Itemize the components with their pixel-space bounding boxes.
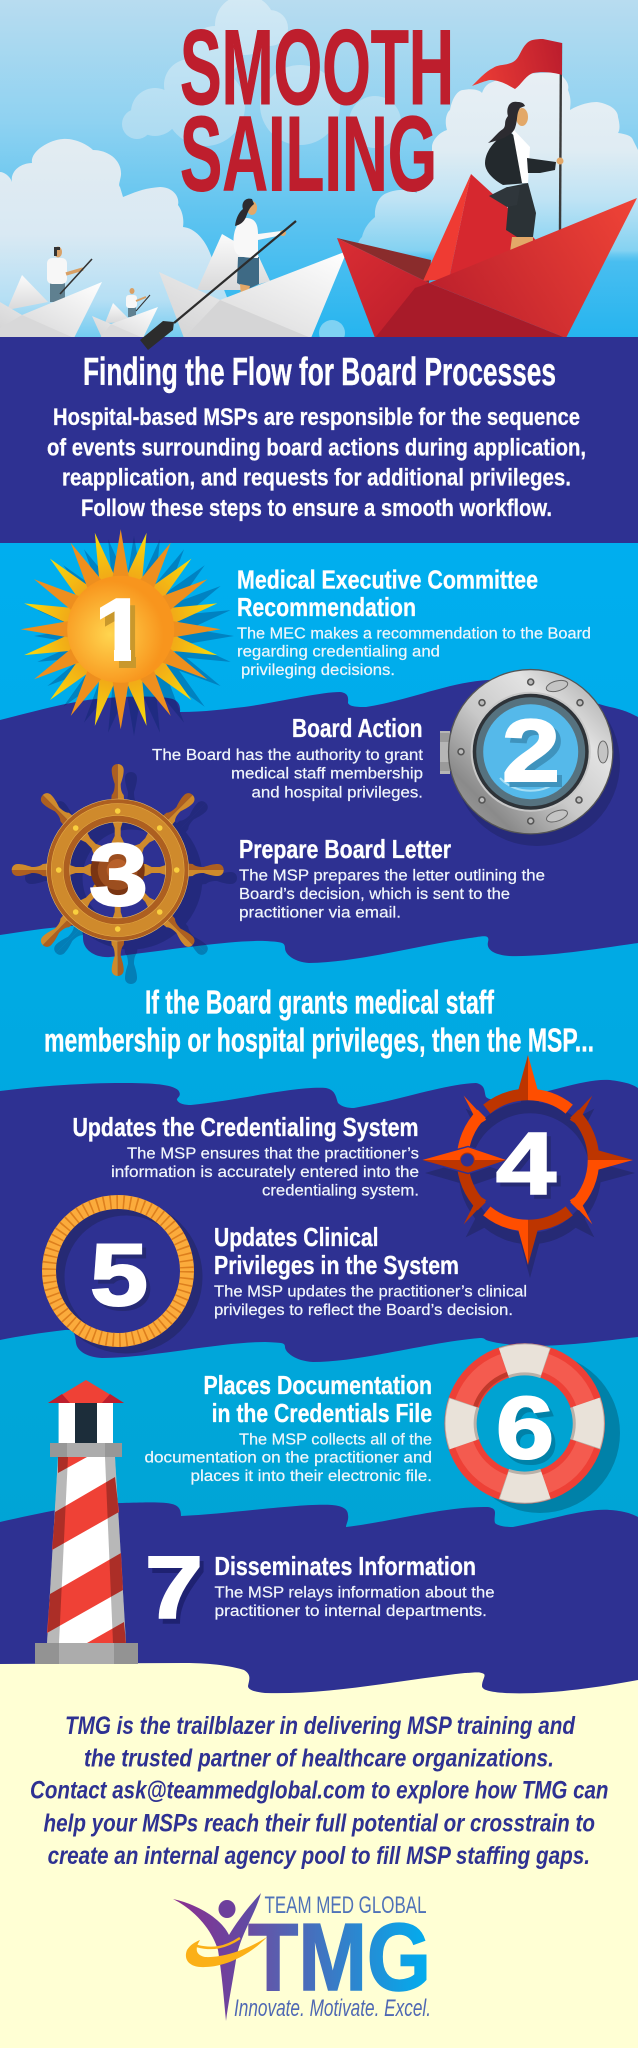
step 2: porthole icon: 2: [507, 706, 565, 805]
step 6 text: [144, 1370, 432, 1485]
step 6: life ring icon: [442, 1341, 607, 1506]
step 1: sun icon: 1: [98, 587, 152, 686]
step 1: sun icon: 1: [93, 580, 147, 679]
step 7 text: The MSP relays information about the: [214, 1585, 494, 1602]
hero scene: sky: [0, 0, 638, 340]
step 3 text: practitioner via email.: [239, 905, 401, 922]
footer message: the trusted partner of healthcare organizations.: [84, 1745, 554, 1773]
step 2 text: medical staff membership: [231, 766, 423, 783]
mid heading: If the Board grants medical staff: [145, 984, 495, 1020]
step 6 text: in the Credentials File: [212, 1398, 432, 1428]
step 1 text: Recommendation: [237, 592, 416, 622]
step 2: porthole icon: [440, 669, 620, 846]
footer message: [30, 1712, 608, 1870]
navy intro band: [0, 337, 638, 543]
TMG logo: Innovate. Motivate. Excel.: [234, 1995, 431, 2022]
title: SAILING: [180, 94, 437, 214]
sea background: [0, 543, 638, 1673]
step 7 text: [214, 1551, 494, 1620]
step 3: ship wheel icon: 3: [89, 825, 148, 924]
step 2 text: and hospital privileges.: [252, 784, 423, 801]
step 3 text: [239, 834, 545, 922]
step 1 text: regarding credentialing and: [237, 644, 440, 661]
paper boat 3 with woman and oar: [159, 199, 347, 338]
oar blade overlapping band: [140, 321, 174, 350]
step 6 text: places it into their electronic file.: [190, 1468, 432, 1485]
TMG logo: TMG: [248, 1904, 431, 2011]
cloud: right: [357, 72, 638, 262]
cloud: near big boat: [319, 320, 345, 346]
step 7: number: 7: [149, 1543, 207, 1642]
title: SMOOTH: [180, 7, 454, 127]
step 4 text: The MSP ensures that the practitioner’s: [127, 1145, 419, 1162]
mid heading: [44, 984, 594, 1059]
step 7: number: 7: [145, 1538, 203, 1637]
intro paragraph: [47, 404, 586, 522]
step 2 text: [152, 713, 424, 801]
title: [180, 7, 454, 214]
red paper boat with woman and flag: [337, 39, 637, 338]
step 2 text: The Board has the authority to grant: [152, 747, 424, 764]
step 6: life ring icon: 6: [500, 1383, 558, 1482]
step 4 text: [72, 1112, 419, 1200]
step 3 text: The MSP prepares the letter outlining the: [239, 868, 545, 885]
cream footer background: [0, 1660, 638, 2048]
step 5: rope ring icon: 5: [90, 1225, 148, 1324]
cloud: behind title: [122, 0, 401, 148]
step 4 text: information is accurately entered into the: [111, 1164, 419, 1181]
step 5: rope ring icon: [49, 1202, 195, 1346]
wave panel: step 7: [0, 1502, 638, 1693]
step 4: compass icon: [422, 1055, 635, 1278]
lighthouse: [35, 1380, 138, 1664]
step 7 text: practitioner to internal departments.: [214, 1603, 487, 1620]
step 1 text: Medical Executive Committee: [237, 564, 538, 594]
step 4 text: credentialing system.: [262, 1183, 419, 1200]
TMG logo: [173, 1892, 431, 2022]
step 1: sun icon: [21, 529, 234, 736]
wave panel: steps 4-5: [0, 1080, 638, 1362]
step 3 text: Board’s decision, which is sent to the: [239, 886, 510, 903]
TMG logo: TEAM MED GLOBAL: [264, 1892, 426, 1919]
step 2 text: Board Action: [292, 713, 422, 743]
intro paragraph: Follow these steps to ensure a smooth workflow.: [81, 495, 552, 522]
step 3 text: Prepare Board Letter: [239, 834, 451, 864]
step 5 text: The MSP updates the practitioner’s clinical: [214, 1284, 527, 1301]
step 1 text: [237, 564, 591, 679]
step 6 text: Places Documentation: [204, 1370, 432, 1400]
cloud: left: [0, 139, 228, 340]
step 3: ship wheel icon: [12, 764, 237, 984]
step 2: porthole icon: 2: [502, 701, 560, 800]
wave panel: steps 2-3: [0, 680, 638, 963]
step 5 text: privileges to reflect the Board’s decision.: [214, 1302, 513, 1319]
step 1 text: privileging decisions.: [241, 662, 395, 679]
step 6 text: The MSP collects all of the: [239, 1431, 432, 1448]
step 5: rope ring icon: 5: [94, 1229, 152, 1328]
step 7 text: Disseminates Information: [214, 1551, 476, 1581]
step 6 text: documentation on the practitioner and: [144, 1450, 432, 1467]
step 5 text: Updates Clinical: [214, 1222, 378, 1252]
paper boat 2 with man: [92, 288, 158, 338]
step 6: life ring icon: 6: [496, 1378, 554, 1477]
step 5 text: Privileges in the System: [214, 1250, 459, 1280]
step 5 text: [214, 1222, 527, 1319]
step 1 text: The MEC makes a recommendation to the Board: [237, 625, 591, 642]
step 4 text: Updates the Credentialing System: [72, 1112, 418, 1142]
step 4: compass icon: 4: [500, 1118, 560, 1217]
paper boat 1 with man: [0, 246, 102, 338]
step 4: compass icon: 4: [496, 1114, 556, 1213]
